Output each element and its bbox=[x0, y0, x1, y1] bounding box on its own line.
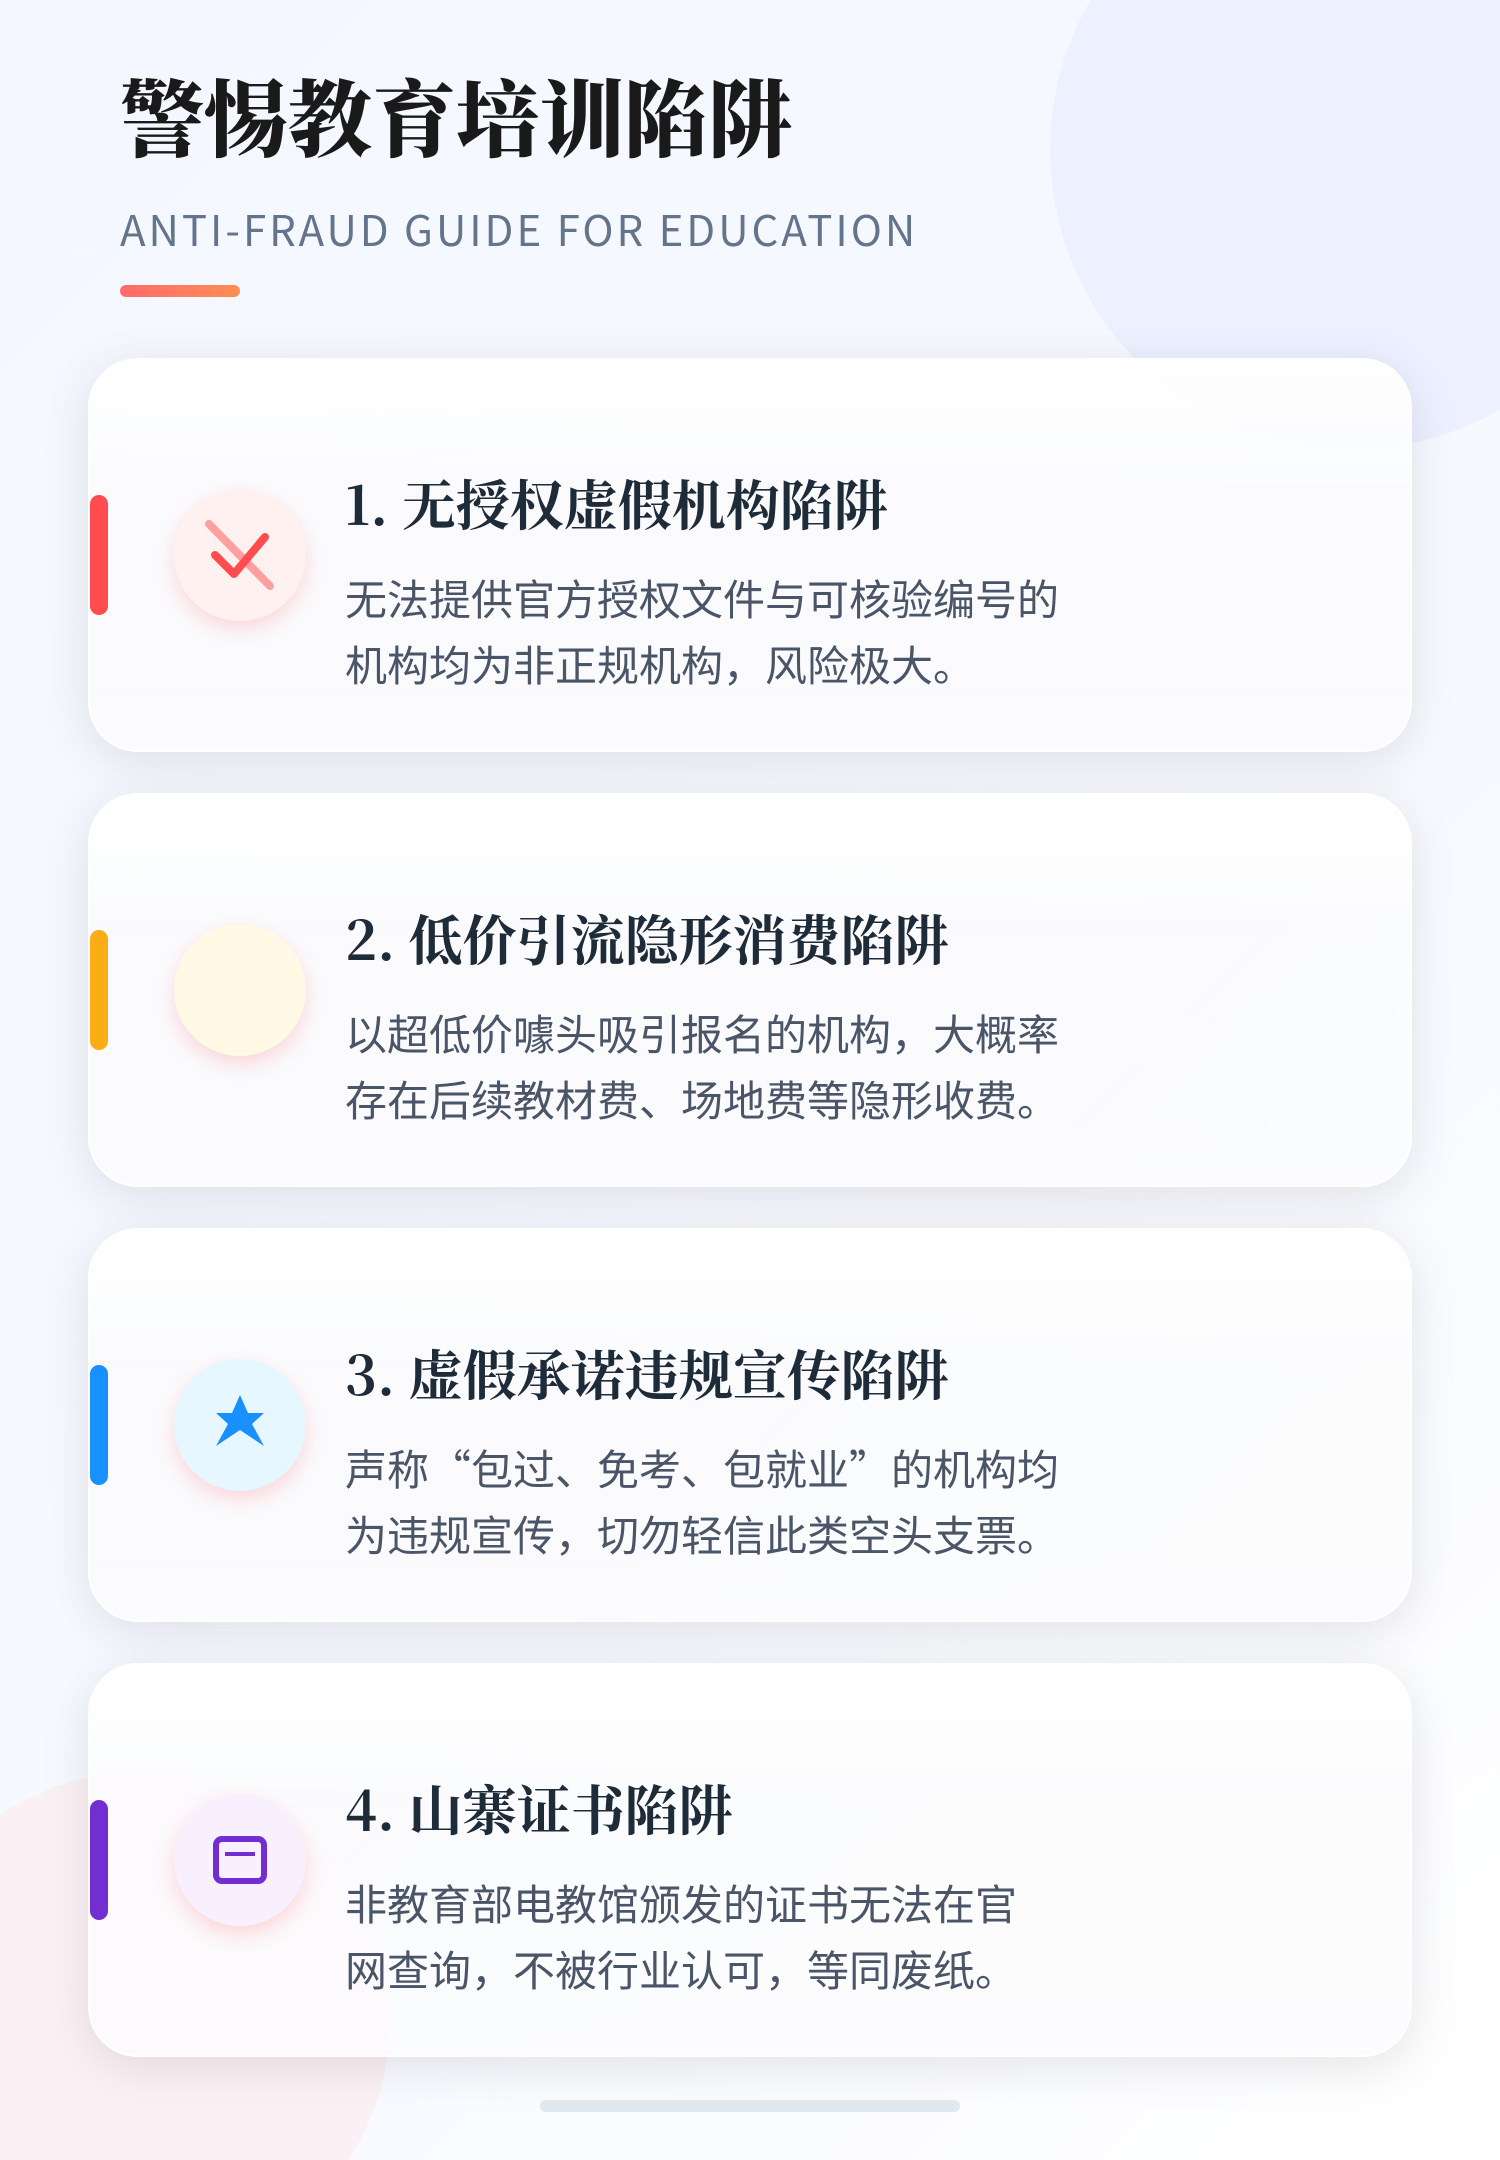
decorative circle: bottom left bbox=[0, 1772, 392, 2160]
card stripe: red bbox=[90, 495, 108, 615]
body: trap 2 bbox=[345, 1002, 1059, 1129]
panel: trap 4 bbox=[88, 1663, 1412, 2057]
card stripe: blue bbox=[90, 1365, 108, 1485]
body: trap 3 bbox=[345, 1437, 1059, 1564]
body: trap 4: 非教育部电教馆颁发的证书无法在官 bbox=[345, 1872, 1017, 1933]
bottom scroll bar bbox=[540, 2100, 960, 2112]
card stripe: amber bbox=[90, 930, 108, 1050]
panel: trap 1 bbox=[88, 358, 1412, 752]
card stripe: purple bbox=[90, 1800, 108, 1920]
body: trap 4: 网查询，不被行业认可，等同废纸。 bbox=[345, 1938, 1017, 1999]
body: trap 3: 为违规宣传，切勿轻信此类空头支票。 bbox=[345, 1503, 1059, 1564]
subtitle: ANTI-FRAUD GUIDE FOR EDUCATION bbox=[120, 198, 918, 259]
icon: empty amber circle bbox=[174, 924, 306, 1056]
heading: trap 2: 2. 低价引流隐形消费陷阱 bbox=[345, 899, 949, 976]
body: trap 2: 存在后续教材费、场地费等隐形收费。 bbox=[345, 1068, 1059, 1129]
icon: red cross and check bbox=[174, 489, 306, 621]
heading: trap 1: 1. 无授权虚假机构陷阱 bbox=[345, 464, 888, 541]
title accent bar bbox=[120, 285, 240, 297]
heading: trap 4: 4. 山寨证书陷阱 bbox=[345, 1769, 733, 1846]
title: 警惕教育培训陷阱 bbox=[120, 54, 792, 175]
panel: trap 2 bbox=[88, 793, 1412, 1187]
panel: trap 3 bbox=[88, 1228, 1412, 1622]
icon: blue star bbox=[174, 1359, 306, 1491]
body: trap 1 bbox=[345, 567, 1059, 694]
decorative circle: top right bbox=[1050, 0, 1500, 450]
body: trap 4 bbox=[345, 1872, 1017, 1999]
heading: trap 3: 3. 虚假承诺违规宣传陷阱 bbox=[345, 1334, 949, 1411]
body: trap 1: 机构均为非正规机构，风险极大。 bbox=[345, 633, 975, 694]
body: trap 2: 以超低价噱头吸引报名的机构，大概率 bbox=[345, 1002, 1059, 1063]
body: trap 3: 声称“包过、免考、包就业”的机构均 bbox=[345, 1437, 1059, 1498]
body: trap 1: 无法提供官方授权文件与可核验编号的 bbox=[345, 567, 1059, 628]
icon: purple certificate bbox=[174, 1794, 306, 1926]
